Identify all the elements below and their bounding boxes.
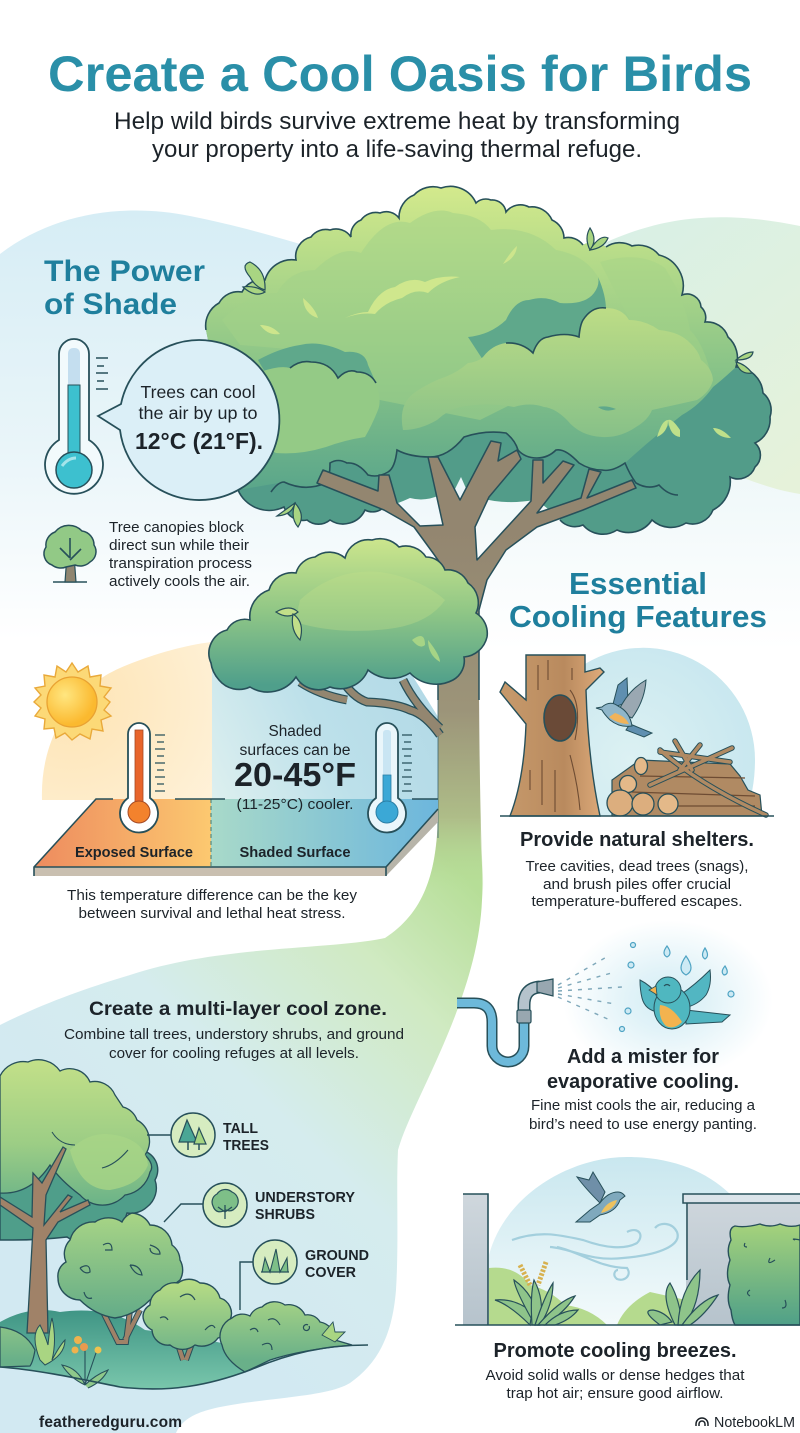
callout: understory shrubs: UNDERSTORY	[255, 1190, 355, 1206]
speech bubble: 12°C (21°F).	[135, 428, 263, 454]
text: canopy note: transpiration process	[109, 556, 252, 572]
text: provide natural shelters: Provide natural shelters.	[520, 829, 754, 851]
feature: cooling breezes	[455, 1157, 800, 1402]
callout: tall trees: TALL	[223, 1121, 258, 1137]
footer: NotebookLM logo: NotebookLM	[714, 1414, 795, 1431]
water drops	[620, 942, 734, 1032]
big tree	[0, 1060, 158, 1333]
shrub	[58, 1213, 183, 1342]
sky background	[489, 1157, 730, 1325]
subtitle: your property into a life-saving thermal refuge.	[152, 136, 642, 163]
title: Create a Cool Oasis for Birds	[48, 46, 752, 102]
text: temperature note: This temperature difference can be the key	[67, 887, 358, 904]
illustration: layered garden	[0, 1060, 368, 1389]
light crescent	[345, 277, 460, 318]
background: green river and lower left blob	[0, 820, 483, 1433]
heading	[44, 255, 205, 321]
small bush	[143, 1279, 231, 1360]
footer: website: featheredguru.com	[39, 1414, 182, 1431]
front right lobe	[402, 308, 713, 437]
text: add a mister: bird’s need to use energy panting.	[529, 1116, 757, 1133]
text: canopy note: direct sun while their	[109, 538, 249, 554]
icon: dead tree with cavity	[500, 655, 604, 816]
plants	[495, 1270, 718, 1325]
icon: cool thermometer	[368, 723, 412, 832]
text: provide natural shelters: and brush piles offer crucial	[543, 876, 731, 893]
mist spray	[558, 955, 622, 1020]
section: multi-layer cool zone	[0, 999, 404, 1389]
text: add a mister: evaporative cooling.	[547, 1071, 739, 1093]
right wall	[683, 1194, 800, 1325]
gap between branches	[453, 477, 468, 503]
upper canopy foliage	[206, 186, 737, 490]
feature: natural shelters	[500, 648, 774, 910]
text: temperature note: between survival and lethal heat stress.	[78, 905, 346, 922]
text: shaded surfaces stat: surfaces can be	[240, 742, 350, 759]
heading: The Power	[44, 255, 205, 288]
description: Combine tall trees, understory shrubs, and ground	[64, 1027, 404, 1043]
trunk and branches	[0, 1147, 90, 1333]
speech bubble: Trees can cool	[140, 382, 256, 402]
label: exposed surface: Exposed Surface	[75, 844, 193, 861]
icon: log pile	[607, 741, 766, 816]
icon: hot thermometer	[120, 723, 165, 832]
dark lower foliage	[0, 1150, 158, 1242]
description: cover for cooling refuges at all levels.	[109, 1046, 359, 1062]
front left lobe	[250, 362, 380, 453]
text: promote cooling breezes	[486, 1340, 744, 1402]
callout: understory shrubs: SHRUBS	[255, 1207, 315, 1223]
small tree canopy	[209, 539, 487, 692]
callout: tall trees: TREES	[223, 1138, 269, 1154]
text: add a mister: Add a mister for	[567, 1046, 719, 1068]
text: provide natural shelters: Tree cavities, dead trees (snags),	[526, 858, 748, 875]
shaded surface panel backdrop	[42, 642, 440, 800]
speech bubble	[98, 340, 279, 500]
platform	[34, 799, 438, 876]
text: provide natural shelters: temperature-buffered escapes.	[532, 893, 742, 910]
mist glow	[563, 920, 773, 1080]
background bushes	[489, 1268, 686, 1325]
text: canopy note: Tree canopies block	[109, 520, 245, 536]
lower canopy outline line	[271, 432, 678, 495]
plant and flower	[35, 1318, 108, 1388]
illustration background	[585, 648, 755, 816]
upper foliage	[0, 1060, 152, 1205]
callout: ground cover	[240, 1240, 369, 1310]
subtitle	[114, 108, 680, 163]
icon: bird in flight	[576, 1172, 625, 1222]
section heading: essential cooling features: Cooling Features	[509, 599, 767, 634]
inner foliage lobes	[222, 211, 603, 420]
low bushes	[0, 1302, 352, 1372]
leaves on canopy	[243, 228, 753, 527]
dark shadow patches	[468, 277, 606, 360]
background: pale sky right of trunk	[440, 450, 800, 650]
text: temperature note	[67, 887, 358, 922]
label: shaded surface: Shaded Surface	[240, 844, 350, 861]
background: left sky blob	[0, 210, 445, 640]
icon: tree	[44, 525, 96, 582]
leaves	[276, 608, 298, 616]
icon: thermometer	[45, 339, 108, 494]
main tree trunk and large canopy	[206, 186, 771, 890]
icon: sun	[34, 663, 111, 740]
ground line	[0, 1345, 368, 1389]
heading: Create a multi-layer cool zone.	[89, 999, 387, 1020]
text: provide natural shelters	[520, 829, 754, 910]
subtitle: Help wild birds survive extreme heat by transforming	[114, 108, 680, 135]
text: promote cooling breezes: Promote cooling breezes.	[494, 1340, 736, 1362]
text: add a mister	[529, 1046, 757, 1133]
callout: understory shrubs	[164, 1183, 355, 1227]
flower spikes	[520, 1262, 546, 1285]
text: promote cooling breezes: trap hot air; ensure good airflow.	[506, 1386, 724, 1402]
text: add a mister: Fine mist cools the air, reducing a	[531, 1097, 756, 1114]
icon: hose	[457, 979, 553, 1062]
background: upper right green blob	[590, 217, 800, 494]
text: shaded surfaces stat: (11-25°C) cooler.	[236, 796, 354, 813]
callout: ground cover: COVER	[305, 1265, 357, 1281]
ground cover	[0, 1310, 300, 1389]
canopy base	[206, 186, 771, 534]
callout: tall trees	[147, 1113, 269, 1157]
text: canopy note: actively cools the air.	[109, 574, 250, 590]
text: promote cooling breezes: Avoid solid walls or dense hedges that	[486, 1368, 744, 1384]
callout: ground cover: GROUND	[305, 1248, 369, 1264]
trunk crown and branches	[317, 441, 636, 700]
text: canopy note	[109, 520, 252, 590]
text: shaded surfaces stat	[234, 723, 356, 813]
icon: bird flying	[596, 678, 652, 737]
text: shaded surfaces stat: 20-45°F	[234, 756, 356, 793]
section heading: essential cooling features	[509, 566, 767, 634]
branches under small canopy	[300, 677, 440, 735]
heading: of Shade	[44, 288, 177, 321]
diagram: exposed vs shaded surface	[34, 663, 438, 922]
trunk lower fade	[425, 690, 484, 890]
hedge	[728, 1224, 800, 1325]
wind swirls	[512, 1224, 678, 1280]
section: the power of shade	[44, 255, 279, 590]
icon: happy bird	[640, 970, 730, 1029]
section heading: essential cooling features: Essential	[569, 566, 707, 601]
text: shaded surfaces stat: Shaded	[268, 723, 322, 740]
canopy outline	[206, 186, 771, 534]
feature: mister	[457, 920, 773, 1133]
description	[64, 1027, 404, 1062]
speech bubble: the air by up to	[138, 403, 258, 423]
left wall	[463, 1194, 488, 1325]
